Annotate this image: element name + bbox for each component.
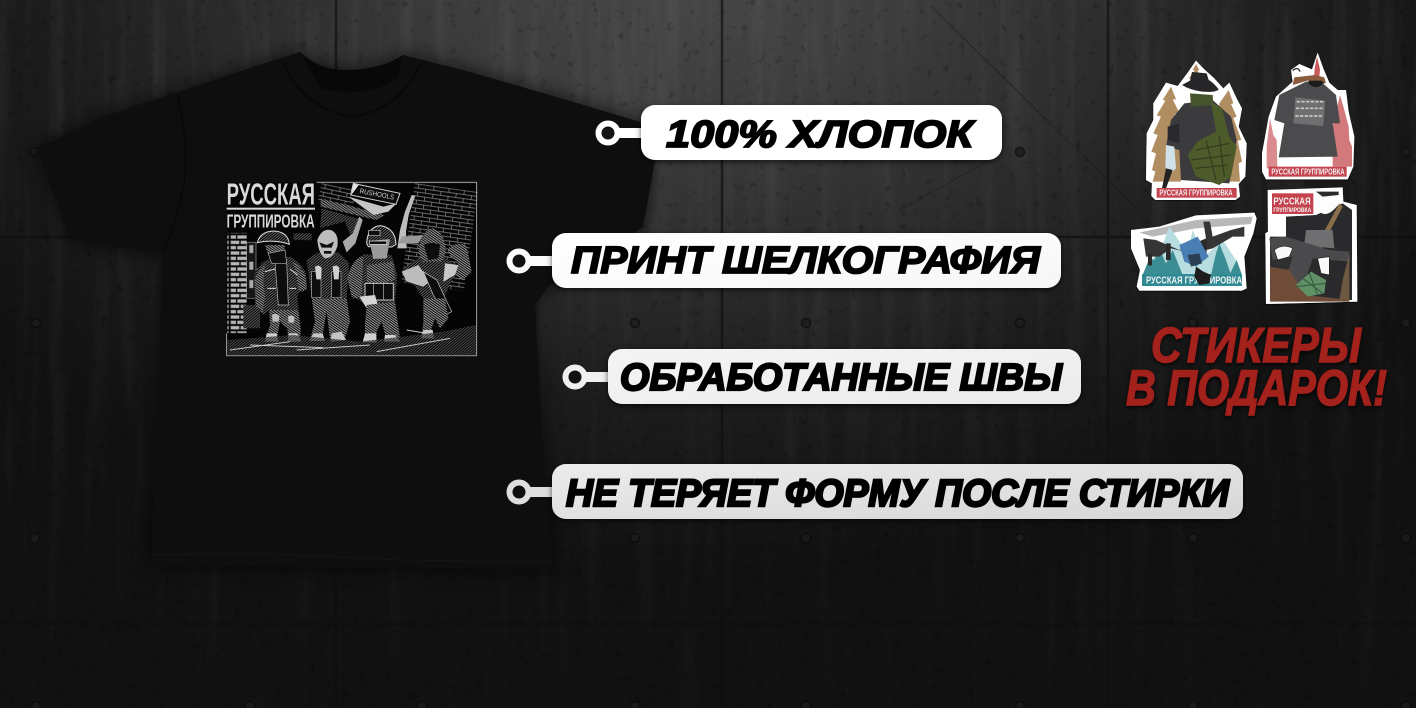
print: title: ГРУППИРОВКА: [227, 211, 315, 232]
print: rushools sign: RUSHOOLS: [359, 188, 395, 202]
print: title: РУССКАЯ: [227, 177, 315, 211]
gift stickers caption: СТИКЕРЫ: [1151, 319, 1362, 373]
sticker: fighter with rifle: ГРУППИРОВКА: [1273, 207, 1312, 214]
print: ground: [227, 325, 476, 355]
print: figure in helmet: [347, 226, 401, 342]
callout: silkscreen print: [510, 233, 1061, 288]
callout: 100% cotton: 100% ХЛОПОК: [666, 114, 976, 156]
sticker: shirt on hanger with kremlin: [1262, 53, 1354, 179]
sticker: fighter with rifle: [1265, 187, 1357, 304]
stickers group: [1131, 53, 1357, 304]
print: weapons behind figures: [343, 195, 423, 252]
callout: silkscreen print: ПРИНТ ШЕЛКОГРАФИЯ: [571, 240, 1041, 282]
t-shirt print artwork: [227, 177, 478, 356]
gift stickers caption: [1126, 319, 1387, 416]
print: rushools sign: [348, 183, 400, 215]
callout: finished seams: [566, 349, 1081, 404]
print: hooded figure with rifle: [402, 228, 472, 338]
print: figure in cap: [254, 231, 307, 342]
callout: finished seams: ОБРАБОТАННЫЕ ШВЫ: [620, 357, 1063, 399]
sticker: fighter with rifle: РУССКАЯ: [1273, 196, 1311, 207]
sticker: drone over forest: [1131, 213, 1257, 291]
print: figure in balaclava: [307, 230, 350, 342]
sticker: backpack soldier: РУССКАЯ ГРУППИРОВКА: [1159, 189, 1233, 198]
t-shirt: [37, 52, 655, 570]
sticker: drone over forest: РУССКАЯ ГРУППИРОВКА: [1146, 276, 1242, 287]
print: title: [227, 177, 315, 232]
sticker: backpack soldier: [1146, 61, 1247, 200]
sticker: shirt on hanger with kremlin: РУССКАЯ ГРУППИРОВКА: [1271, 168, 1345, 177]
callout: 100% cotton: [598, 105, 1002, 160]
print: brick wall: [227, 182, 478, 356]
callout: keeps shape after washing: НЕ ТЕРЯЕТ ФОРМУ ПОСЛЕ СТИРКИ: [566, 473, 1230, 515]
